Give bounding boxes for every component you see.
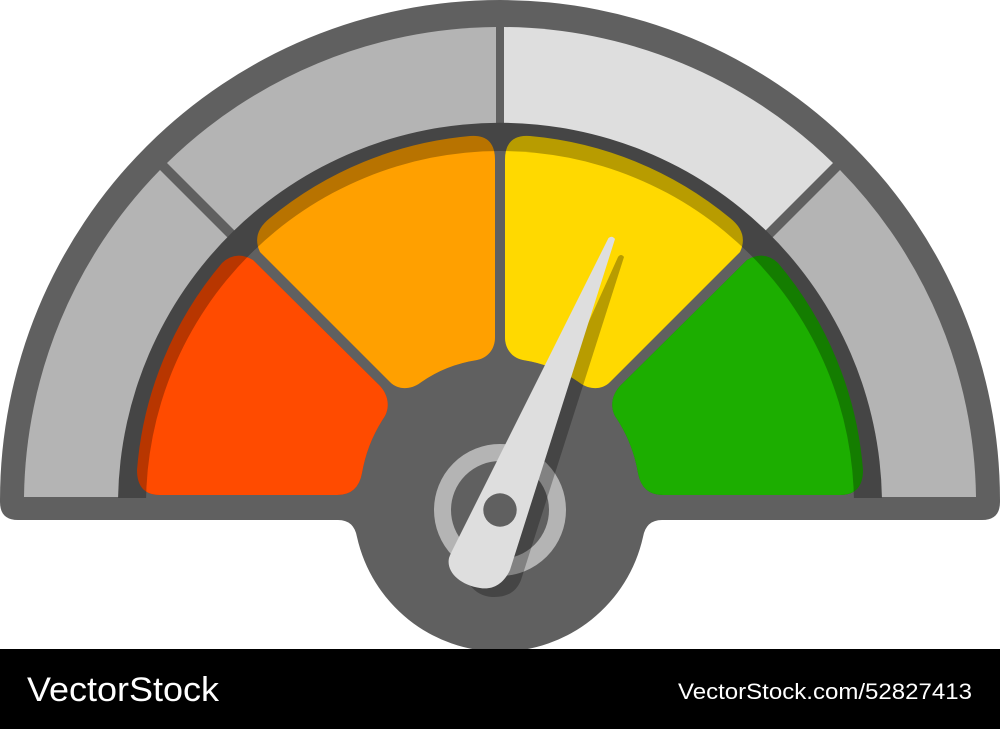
scale segment: upper right [504,27,833,300]
footer bar [0,649,1000,729]
scale segment: upper left [167,27,496,300]
scale segment: left [24,170,260,497]
orange zone [257,136,495,388]
needle pivot [483,493,517,527]
scale segment: right [740,170,976,497]
image id: VectorStock.com/52827413 [678,679,972,704]
red zone [137,256,388,495]
dark inner ring [118,123,882,498]
outer scale segments [24,27,976,497]
brand name: VectorStock [27,671,220,709]
hub ring [442,452,558,568]
yellow zone [505,136,743,388]
needle shadow [470,255,624,597]
inner dial face [146,151,854,498]
green zone [612,256,863,495]
needle [449,237,615,588]
